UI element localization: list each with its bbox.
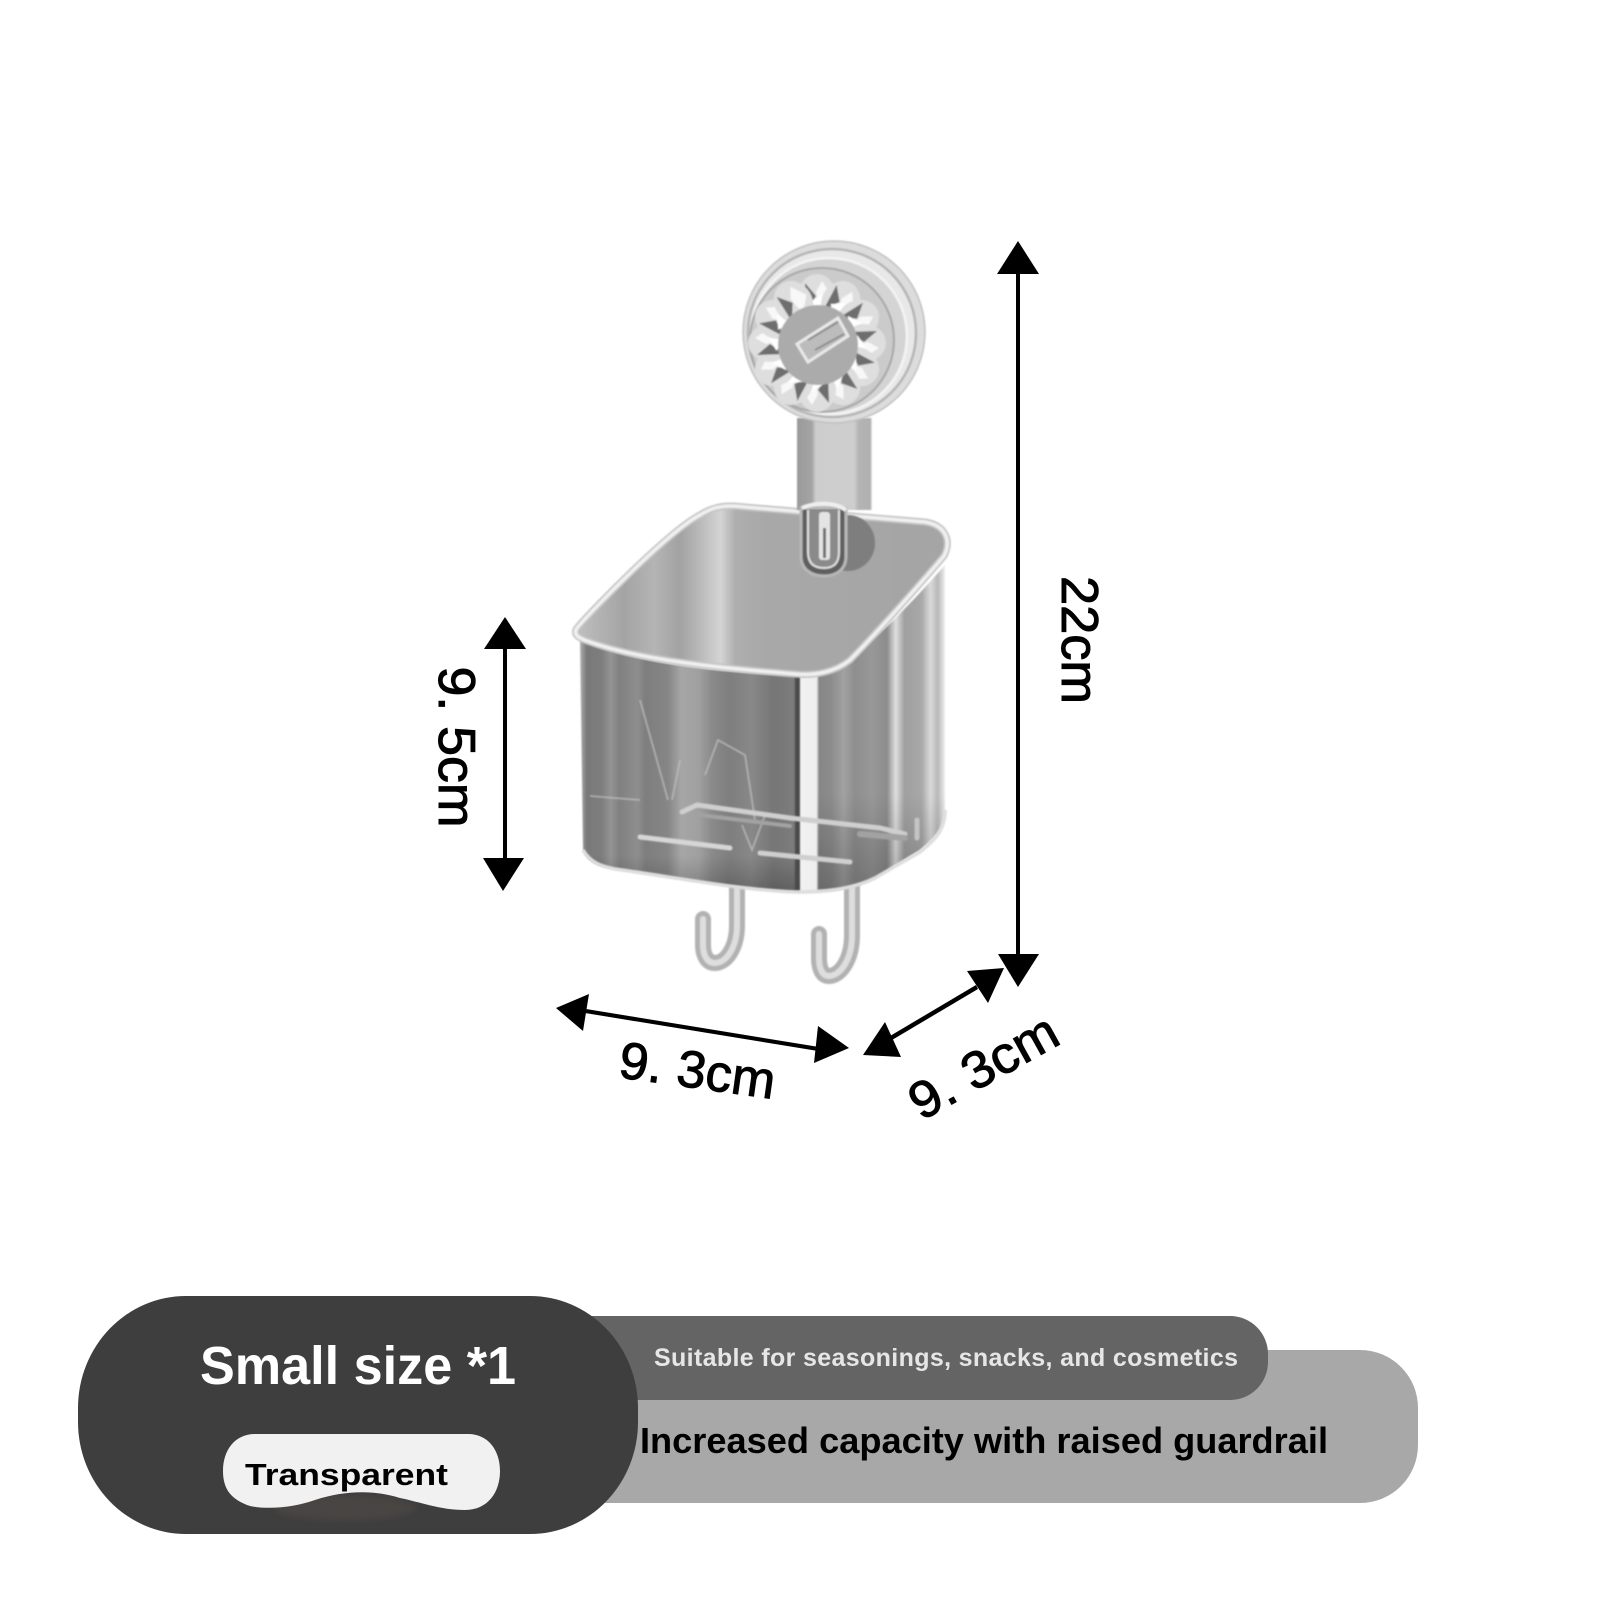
colour pill bbox=[223, 1434, 500, 1520]
mounting clip bbox=[801, 504, 875, 576]
pill shadow bbox=[275, 1496, 415, 1520]
label: width 9.3cm: 9. 3cm bbox=[616, 1032, 779, 1111]
basket side face bbox=[796, 565, 945, 892]
text: capacity: Increased capacity with raised guardrail bbox=[640, 1420, 1328, 1461]
dimension: basket depth 9.3cm bbox=[863, 968, 1069, 1132]
pill shape bbox=[223, 1434, 500, 1510]
arrow: width bbox=[556, 994, 849, 1063]
label: 9.5cm: 9. 5cm bbox=[427, 667, 485, 827]
suction cup bbox=[743, 241, 925, 423]
dimension: total height 22cm bbox=[997, 241, 1108, 987]
bottom info banner bbox=[78, 1296, 1418, 1534]
label: 22cm: 22cm bbox=[1050, 576, 1108, 704]
reflections bbox=[590, 700, 765, 850]
basket rim bbox=[576, 506, 947, 674]
basket front face bbox=[580, 640, 800, 892]
dimension: basket width 9.3cm bbox=[556, 994, 849, 1111]
drain slots bbox=[640, 805, 917, 862]
basket inner opening bbox=[576, 506, 947, 674]
arrow: 9.5cm bbox=[483, 617, 526, 891]
heading: size: Small size *1 bbox=[200, 1336, 516, 1396]
label: depth 9.3cm: 9. 3cm bbox=[899, 1002, 1069, 1132]
label: colour: Transparent bbox=[245, 1457, 448, 1492]
mounting stem bbox=[797, 418, 872, 510]
arrow: depth bbox=[863, 968, 1004, 1057]
arrow: 22cm bbox=[997, 241, 1039, 987]
petals bbox=[744, 270, 890, 416]
panel: size badge bbox=[78, 1296, 638, 1534]
panel: usage bar bbox=[520, 1316, 1268, 1400]
product: transparent wall caddy bbox=[576, 241, 947, 976]
panel: capacity bar bbox=[520, 1350, 1418, 1503]
basket bottom edge bbox=[583, 810, 945, 892]
dimension: basket height 9.5cm bbox=[427, 617, 526, 891]
hooks bbox=[703, 880, 852, 976]
outer ring bbox=[743, 241, 925, 423]
screw bbox=[797, 318, 848, 362]
text: usage: Suitable for seasonings, snacks, and cosmetics bbox=[654, 1344, 1238, 1372]
hub bbox=[778, 305, 858, 385]
